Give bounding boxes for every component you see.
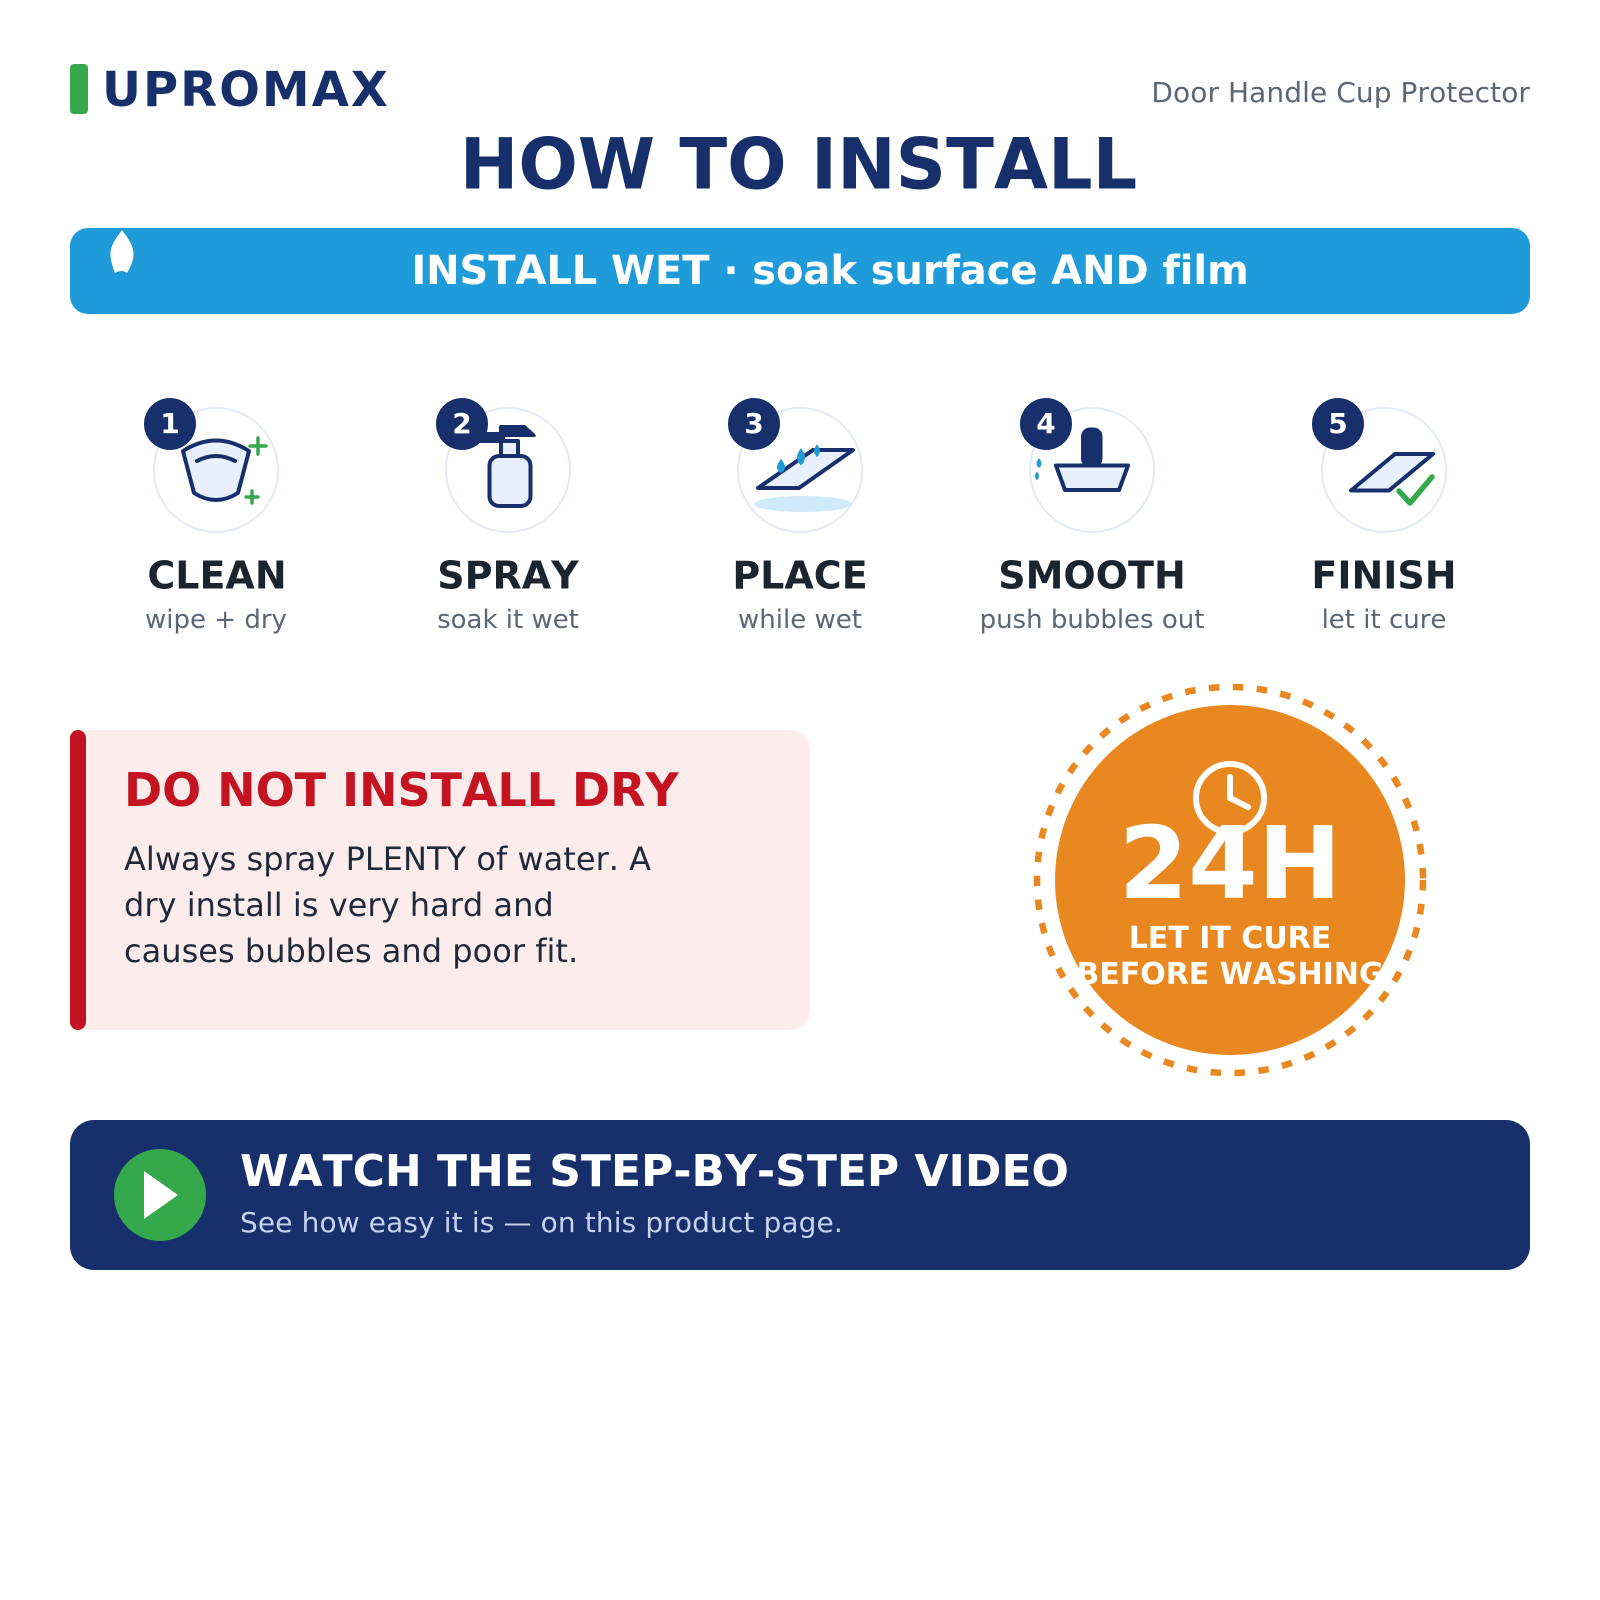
icon: droplets <box>777 444 820 473</box>
step label: PLACE <box>732 554 868 598</box>
step circle <box>446 408 570 532</box>
icon: play button <box>114 1149 206 1241</box>
warning body text: Always spray PLENTY of water. A <box>124 840 651 878</box>
cure text <box>1076 921 1384 992</box>
icon: water drop <box>110 230 134 273</box>
video panel background <box>70 1120 1530 1270</box>
icon: film <box>1351 454 1433 490</box>
step label: FINISH <box>1311 554 1457 598</box>
badge: 24h cure <box>1037 687 1423 1073</box>
step number <box>144 398 196 450</box>
warning body text: dry install is very hard and <box>124 886 554 924</box>
banner text: INSTALL WET · soak surface AND film <box>411 248 1249 294</box>
24h text: 24H <box>1119 805 1341 922</box>
warning body text <box>124 840 651 970</box>
step 2: spray <box>436 398 579 635</box>
video heading: WATCH THE STEP-BY-STEP VIDEO <box>240 1146 1069 1197</box>
panel: video call to action <box>70 1120 1530 1270</box>
step 1: clean <box>144 398 287 635</box>
step caption: push bubbles out <box>980 605 1204 635</box>
step circle <box>1030 408 1154 532</box>
step circle <box>1322 408 1446 532</box>
step 3: place <box>728 398 868 635</box>
orange disc <box>1055 705 1405 1055</box>
icon: check mark <box>1399 477 1432 503</box>
brand name: UPROMAX <box>102 62 390 118</box>
step caption: soak it wet <box>437 605 579 635</box>
step 4: smooth <box>980 398 1204 635</box>
warning accent bar <box>70 730 86 1030</box>
icon: water puddle <box>754 496 852 512</box>
step number <box>1312 398 1364 450</box>
icon: clock <box>1196 764 1264 832</box>
step caption: while wet <box>738 605 862 635</box>
step caption: wipe + dry <box>145 605 287 635</box>
icon: sparkles <box>246 438 266 503</box>
logo accent bar <box>70 64 88 114</box>
icon: cup <box>183 440 249 500</box>
panel: warning <box>70 730 810 1030</box>
icon: film <box>758 450 853 488</box>
step circle <box>154 408 278 532</box>
title: HOW TO INSTALL <box>460 124 1137 206</box>
cure text: LET IT CURE <box>1129 921 1331 956</box>
step number <box>1020 398 1072 450</box>
step circle <box>738 408 862 532</box>
warning background <box>70 730 810 1030</box>
banner: install wet <box>70 228 1530 314</box>
warning heading: DO NOT INSTALL DRY <box>124 763 679 817</box>
icon: spray bottle <box>471 425 536 506</box>
step number: 2 <box>452 407 472 440</box>
step number <box>436 398 488 450</box>
video caption: See how easy it is — on this product page. <box>240 1206 843 1239</box>
icon: squeegee <box>1056 428 1128 490</box>
step number: 4 <box>1036 407 1056 440</box>
step number <box>728 398 780 450</box>
warning body text: causes bubbles and poor fit. <box>124 932 578 970</box>
step caption: let it cure <box>1322 605 1446 635</box>
cure text: BEFORE WASHING <box>1076 957 1384 992</box>
step label: CLEAN <box>147 554 287 598</box>
step 5: finish <box>1311 398 1457 635</box>
step label: SMOOTH <box>998 554 1186 598</box>
step label: SPRAY <box>437 554 579 598</box>
step number: 5 <box>1328 407 1348 440</box>
brand logo <box>70 62 390 118</box>
icon: droplets <box>1035 458 1042 480</box>
step number: 1 <box>160 407 180 440</box>
step number: 3 <box>744 407 764 440</box>
dashed ring <box>1037 687 1423 1073</box>
product name: Door Handle Cup Protector <box>1151 76 1530 109</box>
banner background <box>70 228 1530 314</box>
